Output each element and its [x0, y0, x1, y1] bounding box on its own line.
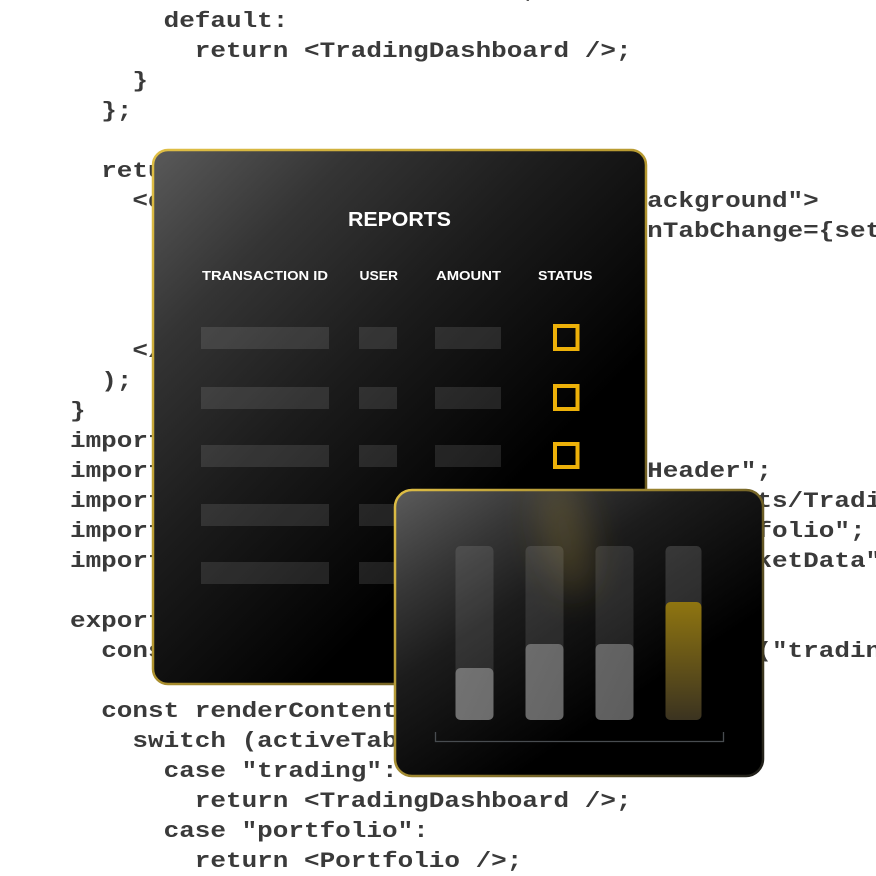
- table row 5: [201, 562, 397, 584]
- background code listing: case "portfolio":: [164, 820, 429, 844]
- table row 1: [201, 326, 578, 349]
- background code listing: case "trading":: [164, 760, 398, 784]
- table row 3: [201, 444, 578, 467]
- background code listing: <div className="min-h-screen bg-background">: [132, 190, 819, 214]
- background code listing: import { Portfolio } from "./components/Portfolio";: [70, 520, 866, 544]
- background code listing: import { MarketData } from "./components/MarketData";: [70, 550, 876, 574]
- background code listing: }: [132, 70, 148, 94]
- table row 2: [201, 386, 578, 409]
- bar 1: [456, 546, 494, 720]
- background code listing: }: [70, 400, 86, 424]
- table row 4: [201, 504, 397, 526]
- table column headers: STATUS: [538, 268, 593, 283]
- table column headers: AMOUNT: [436, 268, 501, 283]
- table column headers: [202, 268, 593, 283]
- background code listing: </div>: [132, 340, 226, 364]
- bar 3: [596, 546, 634, 720]
- background code listing: </main>: [164, 310, 273, 334]
- panel: reports table: [153, 150, 646, 684]
- background code listing: return <TradingDashboard />;: [195, 40, 632, 64]
- table column headers: TRANSACTION ID: [202, 268, 328, 283]
- background code listing: return <TradingDashboard />;: [195, 790, 632, 814]
- chart axis bracket: [436, 732, 724, 742]
- heading: reports: REPORTS: [348, 209, 451, 231]
- background code listing: );: [101, 370, 132, 394]
- panel: bar chart card: [395, 469, 763, 776]
- table column headers: USER: [360, 268, 399, 283]
- bar 4 highlighted: [666, 546, 702, 720]
- bar 2: [526, 546, 564, 720]
- background code listing: default:: [164, 10, 288, 34]
- gold glow: [528, 491, 603, 600]
- background code listing: <main>: [164, 250, 257, 274]
- background code listing: import { Header } from "./components/Header";: [70, 460, 772, 484]
- background code listing: return <Portfolio />;: [195, 850, 522, 874]
- background code listing: };: [101, 100, 132, 124]
- background code listing: {renderContent()}: [195, 280, 460, 304]
- background code listing: import { useState } from "react";: [70, 430, 585, 454]
- background code listing: return (: [101, 160, 226, 184]
- background code listing: switch (activeTab) {: [132, 730, 444, 754]
- background code listing: export default function App() {: [70, 610, 554, 634]
- background code listing: const renderContent = () => {: [101, 700, 554, 724]
